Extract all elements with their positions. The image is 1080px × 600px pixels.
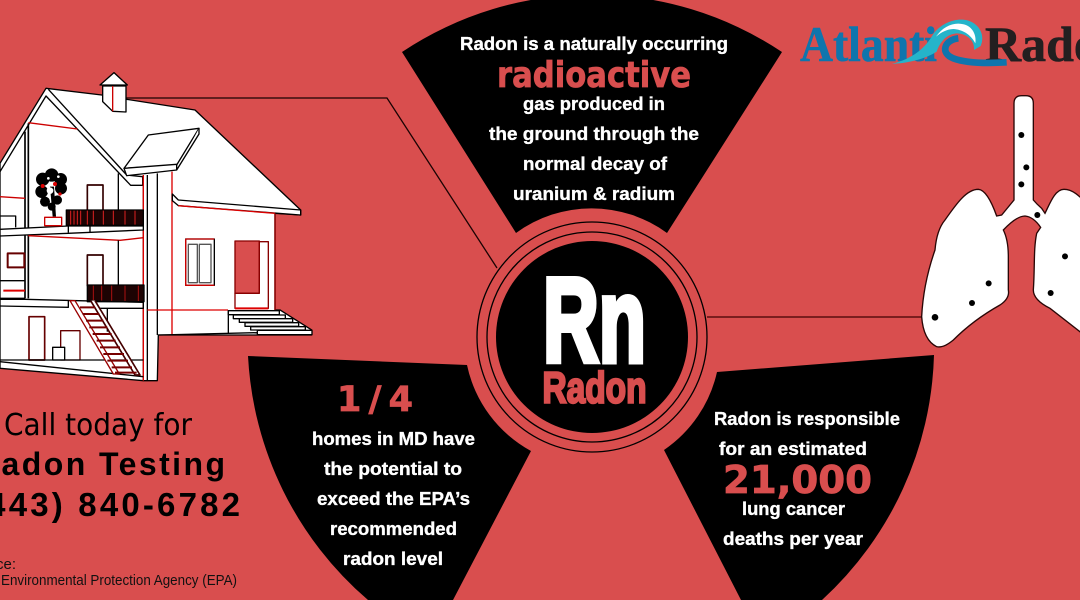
call to action (0, 408, 240, 523)
symbol: Rn: Rn (543, 254, 646, 388)
logo: Atlantic Radon: Atlanti (800, 16, 937, 72)
left rooms (0, 197, 25, 198)
basement door and boxes (29, 317, 45, 360)
source note (0, 556, 237, 589)
text: lung cancer deaths (714, 409, 900, 549)
cupola (100, 73, 127, 112)
icon: lungs (922, 96, 1080, 347)
middle door (87, 255, 103, 286)
text: one in four homes: radon level (343, 549, 443, 569)
front steps (228, 311, 312, 335)
source note: Environmental Protection Agency (EPA) (1, 572, 237, 589)
small window (8, 253, 24, 267)
radon element symbol (477, 222, 707, 452)
text: lung cancer deaths: Radon is responsible (714, 409, 900, 429)
text: radon description: gas produced in (523, 94, 665, 114)
text: radon description (460, 34, 728, 204)
tree in planter (35, 168, 67, 217)
text: one in four homes: 1/4 (337, 380, 413, 420)
text: one in four homes: homes in MD have (312, 429, 475, 449)
text: radon description: radioactive (497, 55, 691, 96)
chimney column (143, 173, 157, 381)
panel: radioactive gas (402, 0, 782, 233)
wedge: bottom left (248, 356, 531, 600)
gable bands (0, 89, 143, 185)
text: radon description: uranium & radium (513, 184, 675, 204)
text: radon description: Radon is a naturally occurring (460, 34, 728, 54)
text: one in four homes: exceed the EPA’s (317, 489, 470, 509)
name: Radon: Radon (542, 364, 646, 412)
text: lung cancer deaths: lung cancer (742, 499, 845, 519)
text: one in four homes: recommended (330, 519, 457, 539)
connector: house to centre (120, 98, 497, 268)
text: lung cancer deaths: 21,000 (723, 458, 872, 502)
staircase (70, 301, 140, 375)
wedge: top (402, 0, 782, 233)
connector: centre to lungs (707, 316, 935, 318)
porch roof (124, 128, 199, 168)
logo wave (892, 20, 1007, 64)
panel: lung cancer statistic (664, 355, 934, 600)
text: radon description: normal decay of (523, 154, 668, 174)
eave (172, 194, 301, 215)
upper door (87, 185, 103, 211)
upper balcony (66, 210, 143, 225)
text: lung cancer deaths: for an estimated (719, 439, 867, 459)
text: one in four homes (312, 380, 475, 569)
radon particles (932, 132, 1068, 321)
text: radon description: the ground through the (489, 124, 699, 144)
wedge: bottom right (664, 355, 934, 600)
logo: Atlantic Radon (800, 16, 1080, 72)
panel: homes statistic (248, 356, 531, 600)
text: call today: Call today for (4, 408, 193, 443)
front door opening (235, 241, 259, 293)
lower balcony (87, 285, 144, 302)
illustration: cutaway house (0, 73, 312, 381)
text: lung cancer deaths: deaths per year (723, 529, 863, 549)
text: one in four homes: the potential to (324, 459, 462, 479)
window (186, 239, 214, 285)
